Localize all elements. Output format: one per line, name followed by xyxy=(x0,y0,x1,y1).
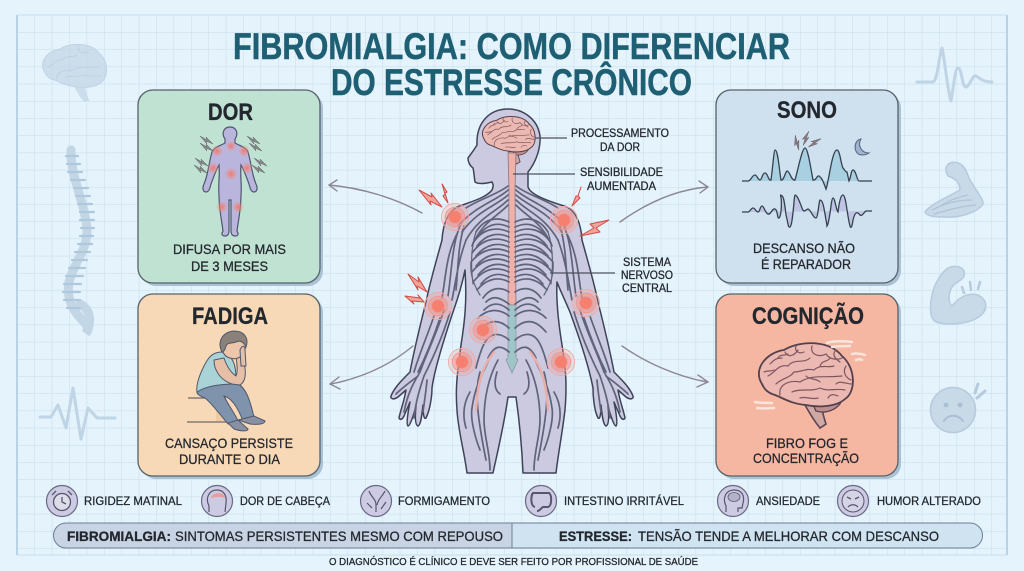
icon: fog wisps xyxy=(755,341,865,408)
symptom: ansiedade: ANSIEDADE xyxy=(756,494,820,508)
arrow: body to sono xyxy=(620,181,708,222)
estresse side xyxy=(512,523,982,548)
background icon: left pulse line xyxy=(40,388,115,439)
heading: dor: DOR xyxy=(208,99,253,126)
icon: moon xyxy=(855,139,869,155)
text: sono description xyxy=(753,240,855,272)
symptom: formigamento xyxy=(360,486,490,516)
heading: sono: SONO xyxy=(777,97,837,124)
text: sono description: DESCANSO NÃO xyxy=(753,240,855,256)
text: fadiga description xyxy=(165,435,293,467)
title xyxy=(233,26,790,103)
background icon: muscle xyxy=(925,162,983,217)
text: dor description: DE 3 MESES xyxy=(191,258,268,274)
title: DO ESTRESSE CRÔNICO xyxy=(331,61,692,103)
body silhouette xyxy=(391,109,633,473)
brain xyxy=(483,117,535,164)
background icon: flexed arm xyxy=(930,266,986,324)
footer disclaimer: O DIAGNÓSTICO É CLÍNICO E DEVE SER FEITO POR PROFISSIONAL DE SAÚDE xyxy=(329,555,698,568)
pain point hip right xyxy=(548,348,574,376)
annotation: sensibilidade aumentada: SENSIBILIDADE xyxy=(580,167,663,179)
comparison bar xyxy=(53,523,982,548)
estresse side: ESTRESSE: xyxy=(559,528,632,544)
pain point shoulder left xyxy=(442,204,468,230)
symptom: intestino irritavel xyxy=(526,486,684,516)
symptom: humor alterado xyxy=(838,486,981,516)
symptom: rigidez matinal xyxy=(46,486,182,516)
text: cognicao description: CONCENTRAÇÃO xyxy=(753,450,859,466)
icon: brain xyxy=(759,343,853,428)
icon: small body with pain points xyxy=(194,127,267,236)
title: FIBROMIALGIA: COMO DIFERENCIAR xyxy=(233,26,790,67)
text: cognicao description: FIBRO FOG E xyxy=(766,435,848,451)
annotation: sistema nervoso central: NERVOSO xyxy=(621,270,673,282)
nerves right xyxy=(515,186,628,470)
background icon: sad face xyxy=(930,384,985,432)
text: dor description xyxy=(173,241,286,274)
fibromialgia side xyxy=(53,523,512,548)
symptom: intestino irritavel: INTESTINO IRRITÁVEL xyxy=(564,493,684,508)
panel: cognicao xyxy=(716,294,901,479)
fibromialgia side: FIBROMIALGIA: xyxy=(67,528,171,544)
panel: dor xyxy=(138,90,323,286)
annotation: processamento da dor xyxy=(535,128,669,154)
chart: sleep waves bottom xyxy=(742,195,872,227)
background icon: right pulse line xyxy=(917,48,992,101)
symptom: humor alterado: HUMOR ALTERADO xyxy=(877,494,981,508)
text: sono description: É REPARADOR xyxy=(761,256,851,272)
icon: tired seated person xyxy=(187,331,265,431)
estresse side: TENSÃO TENDE A MELHORAR COM DESCANSO xyxy=(638,528,939,544)
pain point abdomen xyxy=(470,316,496,344)
arrow: body to cognicao xyxy=(622,346,708,387)
text: cognicao description xyxy=(753,435,859,466)
nerves left xyxy=(396,186,509,470)
panel: fadiga xyxy=(138,294,323,479)
chart: sleep waves top xyxy=(742,148,872,189)
arrow: body to dor xyxy=(329,180,422,213)
fibromialgia side: SINTOMAS PERSISTENTES MESMO COM REPOUSO xyxy=(175,528,503,544)
annotation: processamento da dor: PROCESSAMENTO xyxy=(571,128,669,140)
symptom: rigidez matinal: RIGIDEZ MATINAL xyxy=(84,494,182,508)
text: fadiga description: DURANTE O DIA xyxy=(179,451,281,467)
arrow: body to fadiga xyxy=(330,346,413,389)
annotation: sistema nervoso central xyxy=(550,257,673,295)
central body figure xyxy=(391,109,633,473)
annotation: sistema nervoso central: CENTRAL xyxy=(622,283,673,295)
annotation: sensibilidade aumentada xyxy=(513,167,663,193)
heading: cognicao: COGNIÇÃO xyxy=(752,302,864,330)
symptom: ansiedade xyxy=(718,486,820,516)
pain point shoulder right xyxy=(550,206,578,234)
text: dor description: DIFUSA POR MAIS xyxy=(173,241,286,257)
annotation: sistema nervoso central: SISTEMA xyxy=(623,257,671,269)
background icon: spine xyxy=(63,150,94,333)
heading: fadiga: FADIGA xyxy=(192,303,268,330)
lumbar cord xyxy=(506,305,518,373)
symptom: formigamento: FORMIGAMENTO xyxy=(398,494,490,508)
icon: bolts xyxy=(790,131,821,150)
annotation: processamento da dor: DA DOR xyxy=(600,142,640,154)
pain point hip left xyxy=(448,348,476,376)
symptom: dor de cabeca xyxy=(202,486,330,516)
lightning bolts xyxy=(405,184,609,304)
text: fadiga description: CANSAÇO PERSISTE xyxy=(165,435,293,451)
background icon: brain xyxy=(43,44,107,102)
panel: sono xyxy=(716,90,901,286)
spinal cord xyxy=(508,153,516,305)
annotation: sensibilidade aumentada: AUMENTADA xyxy=(587,181,656,193)
symptom: dor de cabeca: DOR DE CABEÇA xyxy=(240,494,330,508)
sciatic nerves xyxy=(476,352,548,410)
pain point elbow right xyxy=(572,290,600,316)
pain point elbow left xyxy=(424,292,452,320)
